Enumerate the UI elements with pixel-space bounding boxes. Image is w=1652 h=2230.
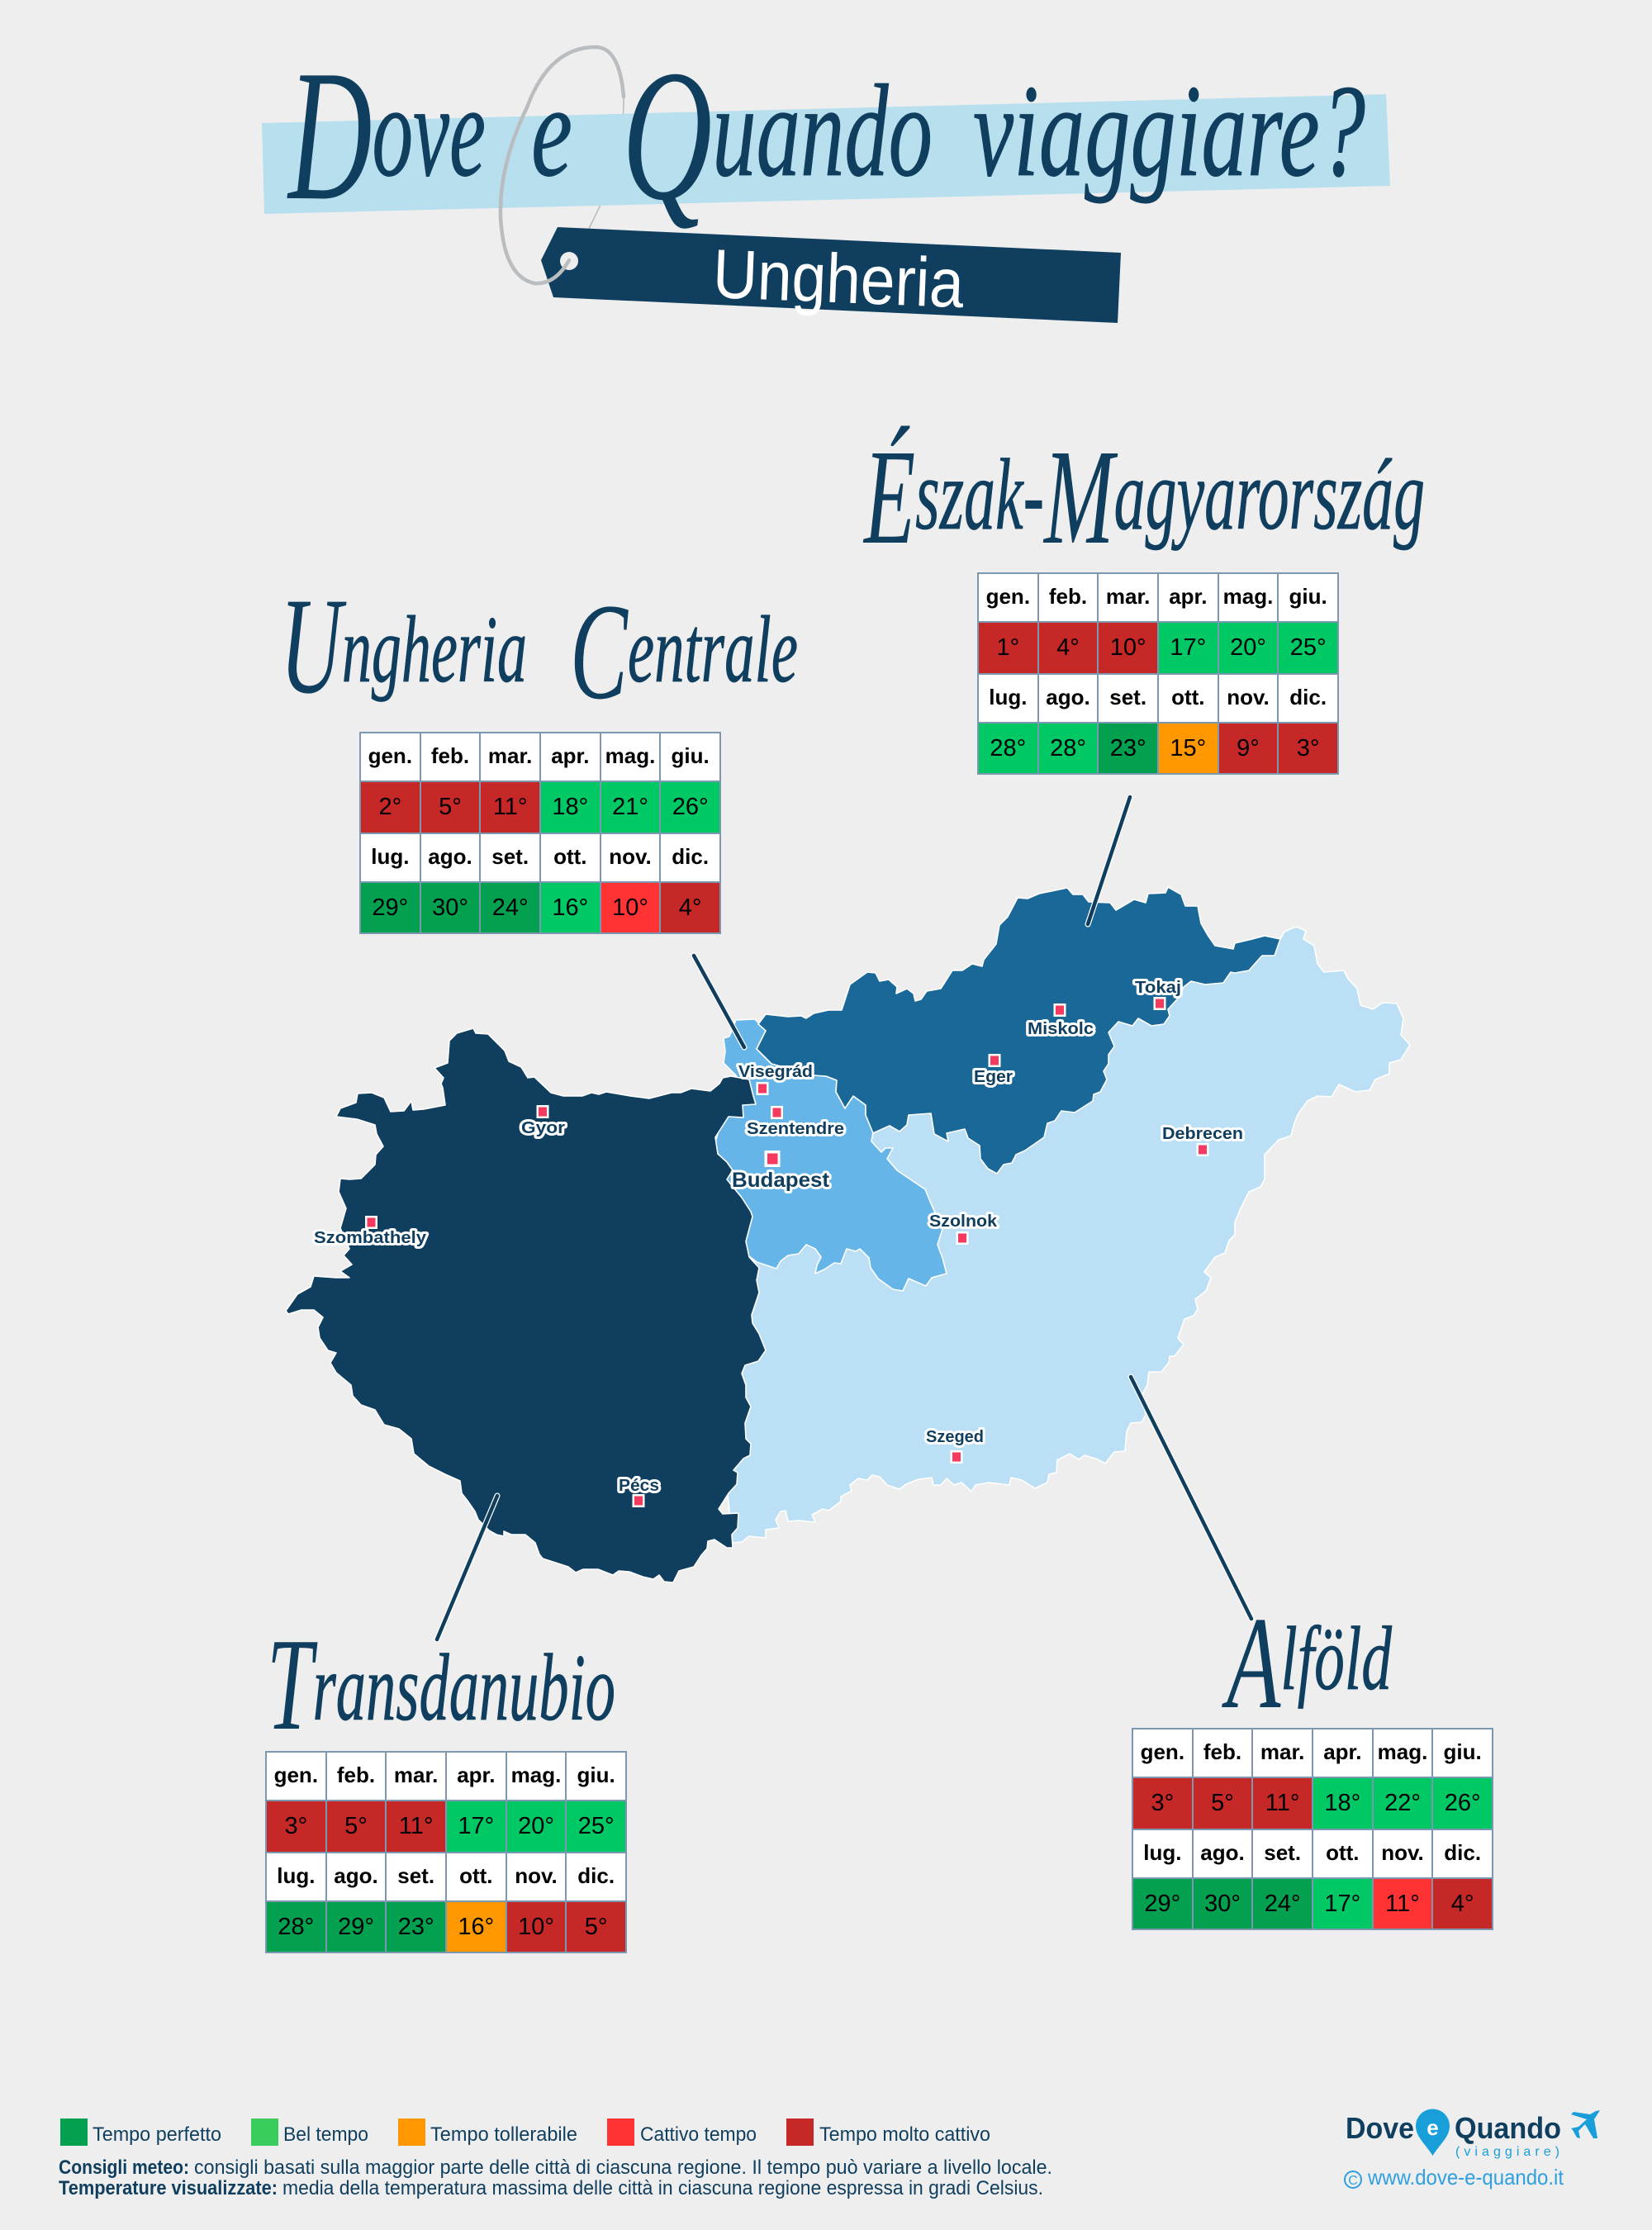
table: Ungheria Centrale: mar.: [488, 743, 532, 768]
table: Ungheria Centrale: 4°: [679, 894, 702, 920]
logo: Quando: [1455, 2111, 1561, 2145]
table: Észak-Magyarország: 17°: [1170, 634, 1206, 661]
legend: tempo tollerabile: [398, 2118, 577, 2146]
heading: Transdanubio: ransdanubio: [313, 1635, 615, 1741]
heading: Alföld: lföld: [1280, 1608, 1393, 1709]
region: Alföld: [727, 927, 1410, 1543]
main title: Q: [622, 32, 712, 240]
table: Észak-Magyarország: apr.: [1169, 583, 1207, 608]
table: Észak-Magyarország: 3°: [1297, 735, 1320, 762]
table: Transdanubio: apr.: [457, 1763, 495, 1787]
table: Transdanubio: nov.: [515, 1863, 558, 1888]
icon: map pin: [1416, 2109, 1450, 2156]
table: Ungheria Centrale: set.: [491, 844, 529, 869]
table: Alföld: set.: [1264, 1840, 1301, 1865]
table: Észak-Magyarország: 28°: [990, 735, 1026, 762]
table: Ungheria Centrale: 26°: [672, 794, 709, 820]
table: Észak-Magyarország: mag.: [1223, 583, 1273, 608]
city: Gyor: Gyor: [521, 1119, 565, 1137]
city: Budapest: Budapest: [732, 1169, 830, 1192]
table: Észak-Magyarország: 23°: [1110, 735, 1146, 762]
table: Észak-Magyarország: giu.: [1289, 583, 1327, 608]
table: Észak-Magyarország: 1°: [996, 634, 1019, 661]
table: Ungheria Centrale: nov.: [609, 844, 652, 869]
city: Eger: [974, 1054, 1013, 1086]
table: Alföld: 4°: [1451, 1890, 1474, 1916]
heading: Transdanubio: T: [267, 1611, 318, 1758]
city: Tokaj: [1135, 979, 1181, 1010]
leader line: Észak-Magyarország: [1088, 797, 1130, 924]
table: Transdanubio: 29°: [338, 1913, 374, 1939]
city: Debrecen: Debrecen: [1162, 1125, 1243, 1143]
heading: Észak-Magyarország: agyarország: [1114, 438, 1425, 551]
city: Szombathely: [314, 1216, 427, 1247]
heading: Ungheria Centrale: entrale: [628, 597, 798, 703]
table: Ungheria Centrale: 11°: [493, 794, 527, 820]
table: Ungheria Centrale: [359, 732, 721, 934]
table: Alföld: 11°: [1265, 1790, 1300, 1816]
heading: Észak-Magyarország: M: [1043, 421, 1118, 572]
table: Transdanubio: 20°: [518, 1813, 554, 1839]
table: Transdanubio: [265, 1751, 627, 1953]
main title: viaggiare?: [973, 57, 1365, 204]
city: Szolnok: [929, 1212, 998, 1245]
table: Észak-Magyarország: 25°: [1290, 634, 1327, 661]
table: Ungheria Centrale: 21°: [612, 794, 648, 820]
city: Szombathely: Szombathely: [314, 1229, 427, 1247]
table: Alföld: 22°: [1384, 1790, 1421, 1816]
tag string: thin part behind band: [589, 97, 624, 229]
logo: [1345, 2109, 1600, 2190]
region: Ungheria Centrale: [710, 1019, 947, 1291]
city: Szentendre: [747, 1106, 844, 1138]
title band: [262, 94, 1390, 214]
leader line: Alföld: [1131, 1377, 1251, 1619]
table: Észak-Magyarország: 9°: [1237, 735, 1260, 762]
table: Transdanubio: 25°: [578, 1813, 615, 1839]
city: Pécs: [619, 1477, 659, 1507]
footnotes: Temperature visualizzate:: [59, 2177, 278, 2199]
table: Transdanubio: 5°: [585, 1913, 608, 1939]
table: Transdanubio: 23°: [398, 1913, 434, 1939]
table: Alföld: 11°: [1385, 1890, 1420, 1916]
table: Ungheria Centrale: 10°: [612, 894, 648, 920]
region: Észak-Magyarország: [757, 887, 1280, 1174]
table: Ungheria Centrale: lug.: [371, 844, 409, 869]
table: Alföld: feb.: [1203, 1739, 1241, 1764]
table: Alföld: 26°: [1445, 1790, 1481, 1816]
table: Transdanubio: mag.: [511, 1763, 561, 1787]
table: Alföld: [1132, 1728, 1493, 1930]
main title: uando: [712, 57, 933, 204]
city: Miskolc: Miskolc: [1028, 1020, 1094, 1038]
leader line: Ungheria Centrale: [694, 956, 744, 1047]
table: Ungheria Centrale: 16°: [552, 894, 588, 920]
city: Visegrád: Visegrád: [738, 1063, 813, 1081]
table: Ungheria Centrale: ott.: [553, 844, 587, 869]
main title: D: [287, 32, 373, 240]
table: Transdanubio: 11°: [399, 1813, 433, 1839]
table: Transdanubio: feb.: [337, 1763, 375, 1787]
table: Észak-Magyarország: 4°: [1056, 634, 1080, 661]
leader line: Transdanubio: [437, 1496, 497, 1639]
heading: Ungheria Centrale: ngheria: [342, 597, 527, 703]
legend: cattivo tempo: [607, 2118, 757, 2146]
heading: Észak-Magyarország: É: [863, 421, 915, 572]
legend: tempo molto cattivo: Tempo molto cattivo: [819, 2123, 990, 2146]
table: Ungheria Centrale: 18°: [552, 794, 588, 820]
footnotes: consigli basati sulla maggior parte delle città di ciascuna regione. Il tempo può variare a livello locale.: [194, 2156, 1052, 2179]
table: Ungheria Centrale: 2°: [378, 794, 401, 820]
table: Alföld: 5°: [1211, 1790, 1234, 1816]
heading: Ungheria Centrale: [280, 570, 798, 728]
table: Észak-Magyarország: mar.: [1106, 583, 1150, 608]
footnotes: media della temperatura massima delle città in ciascuna regione espressa in gradi Celsius.: [282, 2177, 1043, 2199]
table: Észak-Magyarország: 20°: [1230, 634, 1266, 661]
region: Transdanubio: [286, 1028, 766, 1582]
table: Alföld: gen.: [1141, 1739, 1184, 1764]
table: Transdanubio: 16°: [458, 1913, 494, 1939]
legend: [60, 2118, 990, 2146]
logo: e: [1427, 2115, 1439, 2140]
table: Észak-Magyarország: nov.: [1227, 684, 1270, 709]
table: Észak-Magyarország: set.: [1109, 684, 1146, 709]
table: Ungheria Centrale: 5°: [439, 794, 462, 820]
tag string: [501, 47, 624, 283]
table: Alföld: apr.: [1323, 1739, 1361, 1764]
country tag: Ungheria: [711, 235, 966, 322]
logo: Dove: [1346, 2111, 1414, 2145]
legend: tempo perfetto: Tempo perfetto: [93, 2123, 221, 2146]
table: Ungheria Centrale: ago.: [428, 844, 472, 869]
table: Észak-Magyarország: 15°: [1170, 735, 1206, 762]
website: www.dove-e-quando.it: [1367, 2165, 1564, 2190]
table: Ungheria Centrale: dic.: [672, 844, 709, 869]
city: Visegrád: [738, 1063, 813, 1095]
table: Ungheria Centrale: giu.: [672, 743, 710, 768]
city: Eger: Eger: [974, 1068, 1013, 1086]
map of Hungary: [286, 887, 1410, 1582]
table: Transdanubio: 17°: [458, 1813, 494, 1839]
table: Transdanubio: mar.: [394, 1763, 438, 1787]
website: C: [1348, 2174, 1358, 2188]
city: Gyor: [521, 1105, 565, 1137]
table: Transdanubio: 10°: [518, 1913, 554, 1939]
icon: plane: [1571, 2110, 1600, 2138]
legend: bel tempo: Bel tempo: [283, 2123, 368, 2146]
table: Transdanubio: giu.: [577, 1763, 615, 1787]
city: Szeged: [926, 1428, 984, 1464]
table: Transdanubio: ago.: [334, 1863, 378, 1888]
table: Alföld: 24°: [1265, 1890, 1301, 1916]
table: Transdanubio: 5°: [344, 1813, 368, 1839]
main title: ove: [373, 57, 486, 204]
table: Ungheria Centrale: 24°: [492, 894, 529, 920]
table: Alföld: 18°: [1324, 1790, 1360, 1816]
heading: Észak-Magyarország: szak-: [915, 438, 1044, 551]
legend: tempo perfetto: [60, 2118, 221, 2146]
table: Észak-Magyarország: feb.: [1049, 583, 1087, 608]
table: Alföld: 29°: [1144, 1890, 1180, 1916]
table: Észak-Magyarország: 28°: [1050, 735, 1086, 762]
heading: Alföld: A: [1222, 1589, 1281, 1736]
city: Szeged: Szeged: [926, 1428, 984, 1446]
table: Észak-Magyarország: ott.: [1171, 684, 1205, 709]
table: Észak-Magyarország: dic.: [1289, 684, 1327, 709]
table: Észak-Magyarország: [977, 572, 1339, 775]
table: Észak-Magyarország: ago.: [1046, 684, 1090, 709]
table: Alföld: 3°: [1151, 1790, 1174, 1816]
table: Transdanubio: dic.: [577, 1863, 615, 1888]
city: Debrecen: [1162, 1125, 1243, 1156]
city: Miskolc: [1028, 1004, 1094, 1038]
city: Szentendre: Szentendre: [747, 1120, 844, 1138]
table: Ungheria Centrale: 29°: [372, 894, 408, 920]
city: Pécs: Pécs: [619, 1477, 659, 1495]
legend: tempo molto cattivo: [786, 2118, 990, 2146]
footnotes: Consigli meteo:: [59, 2156, 189, 2179]
table: Ungheria Centrale: gen.: [368, 743, 412, 768]
table: Alföld: nov.: [1381, 1840, 1424, 1865]
main title: e: [531, 57, 572, 204]
table: Ungheria Centrale: feb.: [431, 743, 469, 768]
city: Tokaj: Tokaj: [1135, 979, 1181, 997]
table: Ungheria Centrale: apr.: [551, 743, 589, 768]
table: Transdanubio: set.: [397, 1863, 434, 1888]
table: Transdanubio: gen.: [274, 1763, 318, 1787]
table: Alföld: 17°: [1324, 1890, 1360, 1916]
footnotes: [59, 2156, 1052, 2199]
heading: Ungheria Centrale: U: [280, 570, 347, 723]
table: Ungheria Centrale: mag.: [605, 743, 655, 768]
city: Budapest: [732, 1151, 830, 1192]
country tag: [541, 227, 1121, 323]
legend: bel tempo: [251, 2118, 368, 2146]
table: Alföld: giu.: [1444, 1739, 1482, 1764]
table: Ungheria Centrale: 30°: [432, 894, 468, 920]
table: Alföld: 30°: [1204, 1890, 1241, 1916]
table: Észak-Magyarország: 10°: [1110, 634, 1146, 661]
table: Észak-Magyarország: gen.: [986, 583, 1030, 608]
table: Transdanubio: 28°: [278, 1913, 314, 1939]
table: Észak-Magyarország: lug.: [989, 684, 1027, 709]
legend: cattivo tempo: Cattivo tempo: [640, 2123, 757, 2146]
table: Transdanubio: 3°: [284, 1813, 307, 1839]
table: Alföld: lug.: [1143, 1840, 1181, 1865]
city: Szolnok: Szolnok: [929, 1212, 998, 1231]
main title: [287, 32, 1365, 240]
legend: tempo tollerabile: Tempo tollerabile: [430, 2123, 577, 2146]
table: Alföld: mag.: [1378, 1739, 1427, 1764]
table: Alföld: ago.: [1200, 1840, 1245, 1865]
table: Alföld: mar.: [1260, 1739, 1304, 1764]
table: Alföld: dic.: [1444, 1840, 1481, 1865]
heading: Ungheria Centrale: C: [570, 576, 629, 728]
table: Alföld: ott.: [1326, 1840, 1360, 1865]
table: Transdanubio: ott.: [459, 1863, 493, 1888]
logo: (viaggiare): [1455, 2145, 1559, 2159]
table: Transdanubio: lug.: [277, 1863, 315, 1888]
